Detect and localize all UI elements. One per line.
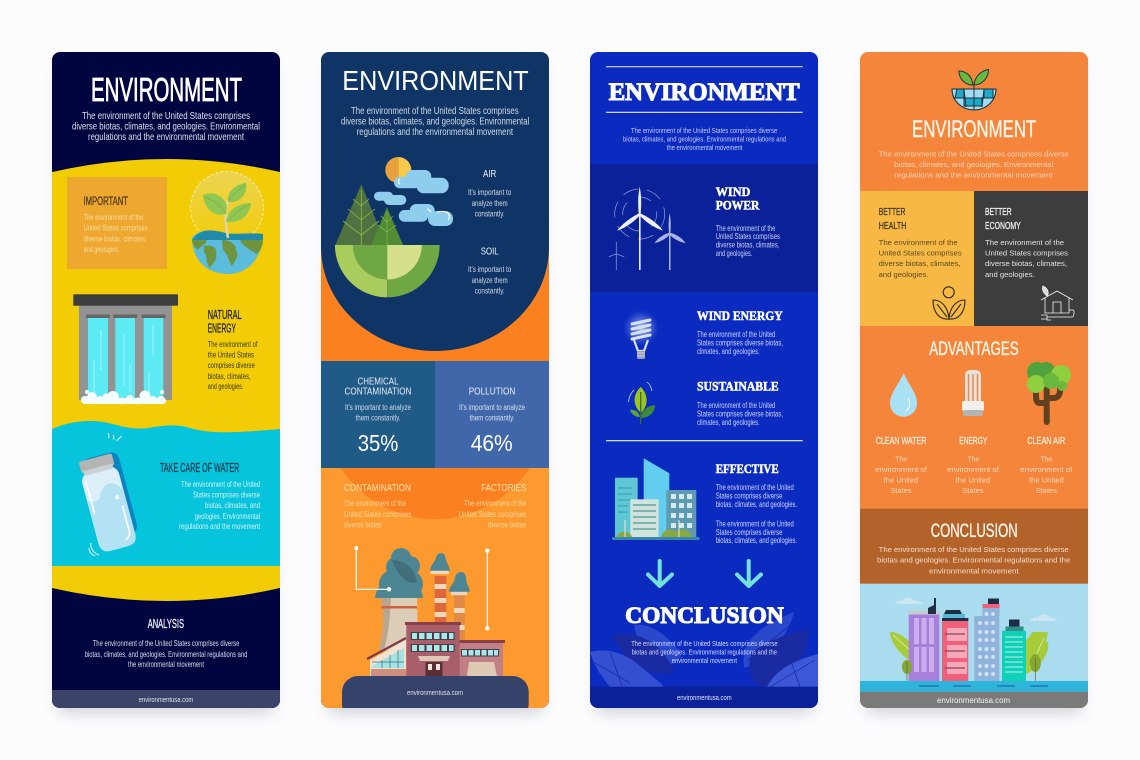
text: take care of water: The environment of the United — [181, 480, 260, 489]
panel: important card: IMPORTANT — [84, 194, 128, 208]
text: take care of water: biotas, climates, and — [205, 501, 260, 510]
text: clean air: States — [1036, 486, 1057, 495]
icon: energy saving bulb — [962, 370, 984, 416]
panel: important card: United States comprises — [84, 224, 148, 232]
text: take care of water — [160, 460, 261, 531]
text: clean air: The — [1040, 454, 1052, 464]
panel: important card: The environment of the — [84, 213, 144, 222]
text: energy: The — [968, 454, 979, 464]
card: better economy: BETTER — [985, 206, 1012, 218]
arrow: right down — [737, 561, 761, 586]
text: air: analyze them — [472, 199, 508, 208]
text: soil: SOIL — [481, 246, 499, 258]
icon: city buildings — [612, 458, 700, 540]
text: natural energy: NATURAL — [208, 307, 242, 322]
text: analysis: ANALYSIS — [148, 616, 184, 631]
text: sustainable — [697, 380, 783, 427]
text: wind energy: States comprises diverse biotas, — [697, 338, 783, 348]
heading: advantages: ADVANTAGES — [929, 338, 1019, 360]
text: analysis: the environmental movement — [128, 660, 205, 669]
icon: nature scene with sun, clouds and trees — [335, 157, 453, 297]
card: better economy — [974, 191, 1088, 326]
text: natural energy — [208, 307, 258, 391]
text: factories: United States comprises — [459, 510, 526, 519]
water band — [52, 421, 280, 566]
icon: water drop — [890, 373, 917, 417]
text: contamination: diverse biotas — [344, 520, 382, 530]
text: effective — [716, 462, 797, 545]
text: contamination: The environment of the — [344, 499, 406, 508]
intro text: The environment of the United States comprises diverse — [631, 126, 777, 135]
panel: important card: and geologies. — [84, 245, 120, 254]
heading: environment with rules: ENVIRONMENT — [609, 79, 800, 106]
text: take care of water: regulations and the movement — [179, 522, 261, 531]
text: contamination: United States comprises — [344, 510, 411, 519]
icon: light bulb — [625, 312, 657, 359]
intro text — [72, 110, 260, 143]
icon: waterfall dam — [73, 294, 178, 404]
text: energy: environment of — [947, 465, 1000, 474]
text: take care of water: geologies. Environmental — [195, 512, 260, 521]
panel: orange environment infographic — [860, 52, 1088, 709]
footer — [590, 687, 818, 709]
icon: factory with smoke — [367, 548, 505, 676]
footer: environmentusa.com — [139, 695, 193, 704]
text: factories: diverse biotas — [488, 520, 526, 530]
text: analysis: biotas, climates, and geologies. Environmental regulations and — [85, 650, 247, 659]
text: energy: States — [962, 486, 984, 495]
heading: environment: ENVIRONMENT — [91, 71, 242, 108]
text: factories: The environment of the — [464, 499, 527, 508]
text: sustainable: climates, and geologies. — [697, 418, 760, 427]
footer: environmentusa.com — [677, 693, 732, 702]
text: effective: States comprises diverse — [716, 528, 783, 537]
text: clean air — [1020, 436, 1073, 495]
text: wind energy: The environment of the United — [697, 330, 775, 339]
heading: environment: ENVIRONMENT — [342, 65, 529, 96]
text: effective: States comprises diverse — [716, 492, 783, 500]
text: clean air: CLEAN AIR — [1027, 436, 1065, 447]
band: conclusion: biotas and geologies. Environmental regulations and the — [877, 556, 1070, 565]
stat card: chemical contamination — [321, 361, 435, 468]
stat card: chemical contamination: them constantly. — [356, 414, 400, 422]
text: clean water: the United — [884, 476, 918, 485]
stat card: pollution: 46% — [471, 430, 513, 456]
text: effective: The environment of the United — [716, 483, 794, 492]
footer pill: environmentusa.com — [407, 688, 463, 697]
text: air: It's important to — [468, 188, 512, 197]
card: better health: and geologies. — [879, 270, 928, 279]
text: effective: biotas, climates, and geologies. — [716, 536, 797, 545]
icon: sustainable leaf — [628, 382, 655, 424]
card: better health: United States comprises — [879, 248, 962, 258]
text: wind power: WIND — [716, 185, 750, 199]
text: clean air: environment of — [1020, 465, 1073, 474]
text: natural energy: ENERGY — [208, 320, 236, 336]
text: air: AIR — [483, 168, 497, 180]
footer — [860, 692, 1088, 709]
stat card: chemical contamination: CHEMICAL — [358, 376, 399, 388]
text: sustainable: SUSTAINABLE — [697, 380, 779, 394]
text: wind power: United States comprises — [716, 232, 780, 241]
text: wind energy: climates, and geologies. — [697, 347, 760, 356]
text: energy: the United — [956, 476, 990, 485]
text: wind energy — [697, 309, 783, 356]
text: natural energy: The environment of — [208, 340, 258, 349]
icon: water bottle — [79, 432, 137, 556]
card: better health: diverse biotas, climates, — [879, 259, 961, 268]
icon: clean air tree — [1027, 362, 1071, 422]
intro text: regulations and the environmental movement — [88, 131, 244, 143]
card: better economy: United States comprises — [985, 248, 1068, 258]
intro text: biotas, climates, and geologies. Environmental regulations and — [623, 134, 786, 144]
text: wind power: POWER — [716, 198, 760, 212]
stat card: pollution: It's important to analyze — [459, 403, 525, 412]
intro text: The environment of the United States comprises — [351, 105, 519, 117]
text: natural energy: the United States — [208, 350, 254, 360]
footer pill — [342, 676, 529, 708]
card: better economy: The environment of the — [985, 238, 1064, 247]
text: contamination: CONTAMINATION — [344, 483, 411, 494]
icon: globe with sprout — [952, 70, 996, 110]
icon: wind turbines — [609, 187, 686, 270]
panel: important card — [67, 177, 167, 269]
text: clean water: States — [890, 486, 912, 495]
text: clean air: the United — [1029, 476, 1064, 485]
card: better health: BETTER — [879, 206, 906, 218]
band: conclusion — [860, 509, 1088, 584]
text: wind energy: WIND ENERGY — [697, 309, 783, 323]
intro text: biotas, climates, and geologies. Environmental — [894, 160, 1054, 169]
text: air — [468, 168, 512, 218]
conclusion text: The environment of the United States comprises diverse — [631, 639, 778, 648]
card: better health — [860, 191, 974, 326]
footer: environmentusa.com — [937, 696, 1010, 705]
text: wind power: diverse biotas, climates, — [716, 240, 779, 250]
text: clean water: The — [895, 454, 907, 464]
card: better economy: and geologies. — [985, 270, 1035, 279]
panel: bright blue environment infographic — [590, 52, 818, 709]
text: sustainable: The environment of the United — [697, 401, 775, 410]
card: better economy: diverse biotas, climates, — [985, 259, 1067, 268]
text: analysis: The environment of the United States comprises diverse — [93, 639, 240, 648]
panel: navy and yellow environment infographic — [52, 52, 280, 708]
text: natural energy: and geologies. — [208, 382, 243, 391]
conclusion text: biotas and geologies. Environmental regulations and the — [632, 648, 777, 656]
text: effective: biotas, climates, and geologies. — [716, 500, 797, 509]
text: soil — [468, 246, 512, 296]
text: factories — [459, 483, 527, 530]
stat card: chemical contamination: It's important to analyze — [345, 403, 411, 412]
text: air: constantly. — [475, 210, 505, 218]
card: better health: The environment of the — [879, 238, 958, 247]
intro text: The environment of the United States comprises diverse — [879, 150, 1069, 158]
text: clean water — [875, 436, 928, 495]
arrow: left down — [648, 561, 672, 586]
decorative leaves — [590, 612, 818, 687]
band: conclusion: CONCLUSION — [931, 521, 1018, 542]
text: energy — [947, 436, 1000, 495]
stat card: pollution — [435, 361, 549, 468]
text: wind power: and geologies. — [716, 249, 752, 258]
text: factories: FACTORIES — [481, 483, 527, 494]
stat card: pollution: POLLUTION — [469, 386, 515, 398]
text: clean water: CLEAN WATER — [876, 436, 926, 447]
text: wind power: The environment of the — [716, 224, 776, 233]
intro text: The environment of the United States comprises — [82, 110, 250, 122]
card: better economy: ECONOMY — [985, 220, 1021, 232]
callout lines — [354, 546, 489, 630]
intro text: diverse biotas, climates, and geologies. Environmental — [72, 120, 260, 132]
footer — [52, 690, 280, 708]
icon: plant growing from globe — [190, 172, 264, 274]
text: take care of water: TAKE CARE OF WATER — [160, 460, 239, 475]
stat card: chemical contamination: 35% — [358, 430, 398, 456]
text: natural energy: comprises diverse — [208, 361, 255, 370]
stat card: chemical contamination: CONTAMINATION — [344, 386, 412, 398]
intro text: regulations and the environmental movement — [357, 126, 513, 138]
text: clean water: environment of — [875, 465, 928, 474]
heading: environment: ENVIRONMENT — [912, 116, 1036, 143]
band: conclusion: environmental movement — [929, 566, 1020, 575]
text: effective: EFFECTIVE — [716, 462, 779, 476]
text: contamination — [344, 483, 411, 530]
text: analysis — [85, 616, 247, 669]
intro text — [623, 128, 786, 150]
text: soil: analyze them — [472, 276, 508, 285]
text: energy: ENERGY — [959, 436, 988, 447]
card: better health: HEALTH — [879, 220, 906, 232]
text: sustainable: States comprises diverse biotas, — [697, 410, 783, 418]
conclusion text — [631, 639, 778, 665]
intro text — [341, 105, 529, 138]
text: natural energy: biotas, climates, — [208, 372, 251, 381]
illustration: city skyline — [860, 584, 1088, 692]
panel: dark blue and orange environment infographic — [321, 52, 549, 720]
text: wind power — [716, 185, 780, 258]
text: take care of water: States comprises diverse — [193, 490, 260, 500]
conclusion text: environmental movement — [672, 656, 738, 665]
text: effective: The environment of the United — [716, 520, 794, 528]
panel: important card: diverse biotas, climates, — [84, 234, 146, 244]
text: soil: constantly. — [475, 286, 505, 296]
intro text: diverse biotas, climates, and geologies. Environmental — [341, 116, 529, 128]
intro text — [879, 150, 1069, 180]
text: soil: It's important to — [468, 265, 512, 274]
band: conclusion: The environment of the United States comprises diverse — [879, 545, 1069, 554]
stat card: pollution: them constantly. — [470, 414, 514, 422]
heading: conclusion: CONCLUSION — [625, 603, 784, 628]
intro text: regulations and the environmental movement — [894, 170, 1054, 180]
intro text: the environmental movement — [667, 143, 743, 152]
